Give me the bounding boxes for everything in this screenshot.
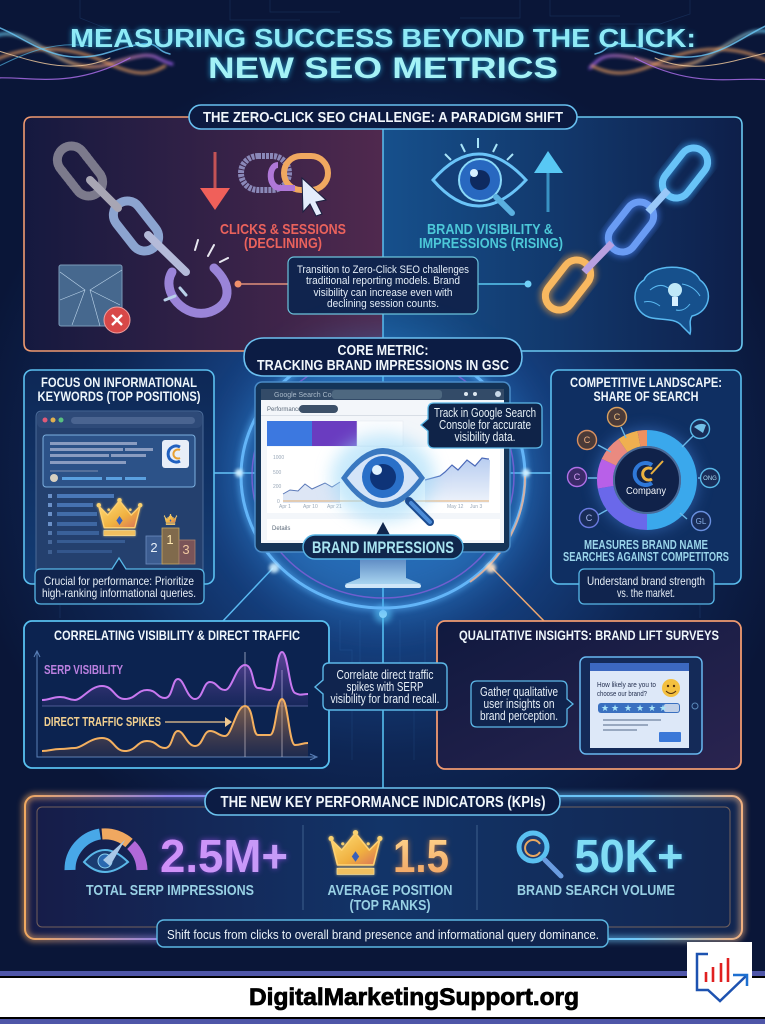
value: brand search: 50K+ — [574, 830, 684, 882]
heading: SHARE OF SEARCH — [594, 388, 698, 404]
browser mockup — [36, 411, 203, 570]
share of search description — [563, 537, 729, 564]
core metric heading pill: CORE METRIC: — [338, 343, 428, 359]
eye with magnifier — [433, 138, 526, 213]
panel: brand lift surveys — [437, 621, 741, 769]
callout: brand strength: Understand brand strength — [587, 574, 705, 588]
label: impressions: TOTAL SERP IMPRESSIONS — [86, 882, 254, 899]
crown icon — [328, 830, 383, 875]
broken chain — [52, 140, 228, 313]
gauge icon — [70, 834, 142, 872]
console screen: Jun 3 — [470, 504, 482, 510]
dual line chart — [34, 651, 317, 760]
decorative wave: left — [0, 26, 172, 79]
competitor nodes — [568, 408, 720, 530]
connectors to callout — [234, 280, 532, 288]
callout: informational keywords: Crucial for performance: Prioritize — [44, 574, 194, 588]
callout: track in GSC: visibility data. — [454, 430, 516, 444]
right border — [383, 117, 742, 351]
title: NEW SEO METRICS — [208, 52, 558, 85]
console screen: May 12 — [447, 504, 464, 510]
callout: zero-click explanation: Transition to Zero-Click SEO challenges — [297, 264, 469, 276]
panel: correlating visibility — [24, 621, 329, 768]
console screen: Apr 21 — [327, 504, 342, 510]
callout: qualitative insights: user insights on — [484, 697, 555, 711]
broken link icon with cursor — [241, 156, 328, 216]
clicks and sessions label: (DECLINING) — [244, 235, 322, 252]
console screen: Performance — [267, 407, 302, 413]
podium: 2 — [150, 540, 158, 555]
competitor nodes: C — [574, 472, 581, 482]
panel: core metric monitor — [255, 382, 542, 588]
glowing chain — [540, 142, 713, 316]
heading: COMPETITIVE LANDSCAPE: — [570, 374, 722, 390]
survey tablet: ★ — [636, 703, 644, 713]
callout: zero-click explanation: visibility can increase even with — [314, 287, 452, 299]
callout: informational keywords — [35, 558, 204, 604]
callout: correlate traffic: spikes with SERP — [346, 680, 424, 694]
circuit pattern — [60, 0, 700, 760]
callout: correlate traffic: Correlate direct traffic — [336, 668, 434, 682]
heading — [570, 374, 722, 404]
heading — [38, 374, 200, 404]
eye magnifier icon — [331, 434, 435, 522]
console top bar: Google Search Console — [274, 392, 348, 399]
callout: qualitative insights: Gather qualitative — [480, 685, 558, 699]
value: impressions: 2.5M+ — [160, 830, 288, 882]
survey tablet: ★ — [601, 703, 609, 713]
chart labels: DIRECT TRAFFIC SPIKES — [44, 714, 161, 729]
label: position: (TOP RANKS) — [350, 897, 430, 914]
panel: zero-click challenge — [24, 105, 742, 351]
console screen: Apr 10 — [303, 504, 318, 510]
heading: KEYWORDS (TOP POSITIONS) — [38, 388, 200, 404]
value: position: 1.5 — [393, 830, 449, 882]
survey tablet: ★ — [659, 703, 667, 713]
callout: track in GSC — [421, 403, 542, 448]
console screen: 0 — [277, 499, 280, 505]
section heading pill — [189, 105, 577, 129]
monitor stand — [345, 552, 421, 588]
survey tablet: ★ — [624, 703, 632, 713]
title: NEW SEO METRICS — [208, 52, 558, 85]
competitor nodes: GL — [696, 517, 707, 526]
brand impressions pill: BRAND IMPRESSIONS — [312, 538, 454, 557]
brand impressions pill — [303, 522, 463, 559]
console screen: 500 — [273, 470, 282, 476]
callout: zero-click explanation — [288, 257, 478, 314]
callout: qualitative insights — [471, 681, 573, 727]
console screen: 200 — [273, 484, 282, 490]
monitor frame — [255, 382, 510, 552]
brain with lightbulb — [635, 267, 708, 334]
brand visibility label: BRAND VISIBILITY & — [427, 221, 553, 238]
share of search description: MEASURES BRAND NAME — [584, 537, 708, 552]
callout: zero-click explanation: traditional reporting models. Brand — [306, 275, 460, 287]
hub ring glow — [233, 336, 533, 616]
competitor nodes: C — [584, 435, 591, 445]
competitor nodes: C — [614, 412, 621, 422]
competitor nodes: C — [586, 513, 593, 523]
callout: track in GSC: Console for accurate — [439, 418, 531, 432]
heading: CORRELATING VISIBILITY & DIRECT TRAFFIC — [54, 627, 300, 643]
clicks and sessions label: CLICKS & SESSIONS — [220, 221, 346, 238]
survey tablet: ★ — [611, 703, 619, 713]
chart labels: SERP VISIBILITY — [44, 662, 123, 677]
survey tablet: choose our brand? — [597, 689, 647, 698]
competitor nodes: ONG — [703, 476, 717, 482]
callout: track in GSC: Track in Google Search — [434, 406, 536, 420]
arrow — [165, 717, 232, 727]
podium: 1 — [166, 532, 174, 547]
console screen — [261, 400, 504, 543]
label: position — [328, 882, 452, 914]
callout: informational keywords: high-ranking informational queries. — [42, 586, 196, 600]
logo badge — [687, 942, 752, 1017]
callout: qualitative insights: brand perception. — [480, 709, 558, 723]
podium: 3 — [182, 542, 190, 557]
value: impressions: 2.5M+ — [160, 830, 288, 882]
KPI heading pill: THE NEW KEY PERFORMANCE INDICATORS (KPIs) — [220, 794, 546, 811]
panel frame — [25, 796, 742, 939]
console screen: Details — [272, 526, 290, 532]
title: MEASURING SUCCESS BEYOND THE CLICK: — [70, 23, 696, 53]
callout: correlate traffic — [315, 663, 447, 710]
heading: FOCUS ON INFORMATIONAL — [41, 374, 197, 390]
share donut chart: Company — [626, 485, 667, 497]
brand visibility label: IMPRESSIONS (RISING) — [419, 235, 563, 252]
crown icon — [97, 498, 142, 536]
decorative wave: right — [590, 24, 765, 80]
callout: correlate traffic: visibility for brand recall. — [330, 692, 440, 706]
takeaway pill — [157, 920, 608, 947]
clicks and sessions label — [220, 221, 346, 252]
right half: visibility rising — [383, 117, 742, 351]
console top bar — [261, 389, 504, 401]
brand visibility label — [419, 221, 563, 252]
survey tablet — [580, 657, 702, 754]
left half: clicks declining — [24, 117, 383, 351]
podium — [146, 514, 195, 564]
panel: informational keywords — [24, 370, 214, 604]
arrow up — [534, 151, 563, 212]
title — [70, 23, 696, 85]
footer bar — [0, 971, 765, 1024]
survey tablet: How likely are you to — [597, 680, 656, 689]
panel: share of search — [551, 370, 741, 604]
cracked screen icon — [59, 265, 130, 333]
console screen: Apr 1 — [279, 504, 291, 510]
core metric heading pill: TRACKING BRAND IMPRESSIONS IN GSC — [257, 358, 509, 374]
divider — [382, 129, 384, 338]
callout: zero-click explanation: declining session counts. — [327, 298, 439, 310]
center connector lines — [214, 340, 551, 795]
footer site name: DigitalMarketingSupport.org — [249, 984, 579, 1011]
callout: brand strength: vs. the market. — [617, 586, 675, 600]
chart labels — [44, 662, 161, 729]
value: position: 1.5 — [393, 830, 449, 882]
KPI heading pill — [205, 788, 560, 815]
console screen: 1000 — [273, 455, 284, 461]
panel: KPIs — [25, 788, 742, 947]
section heading pill: THE ZERO-CLICK SEO CHALLENGE: A PARADIGM SHIFT — [203, 110, 563, 126]
value: brand search: 50K+ — [574, 830, 684, 882]
takeaway pill: Shift focus from clicks to overall brand presence and informational query dominance. — [167, 927, 599, 942]
survey tablet: ★ — [648, 703, 656, 713]
core metric heading pill — [244, 338, 522, 376]
arrow down — [200, 152, 230, 210]
magnifier icon — [519, 833, 561, 876]
share donut chart — [597, 430, 697, 530]
title: MEASURING SUCCESS BEYOND THE CLICK: — [70, 23, 696, 53]
left border — [24, 117, 383, 351]
label: position: AVERAGE POSITION — [328, 882, 452, 899]
label: brand search: BRAND SEARCH VOLUME — [517, 882, 675, 899]
callout: brand strength — [579, 569, 714, 604]
